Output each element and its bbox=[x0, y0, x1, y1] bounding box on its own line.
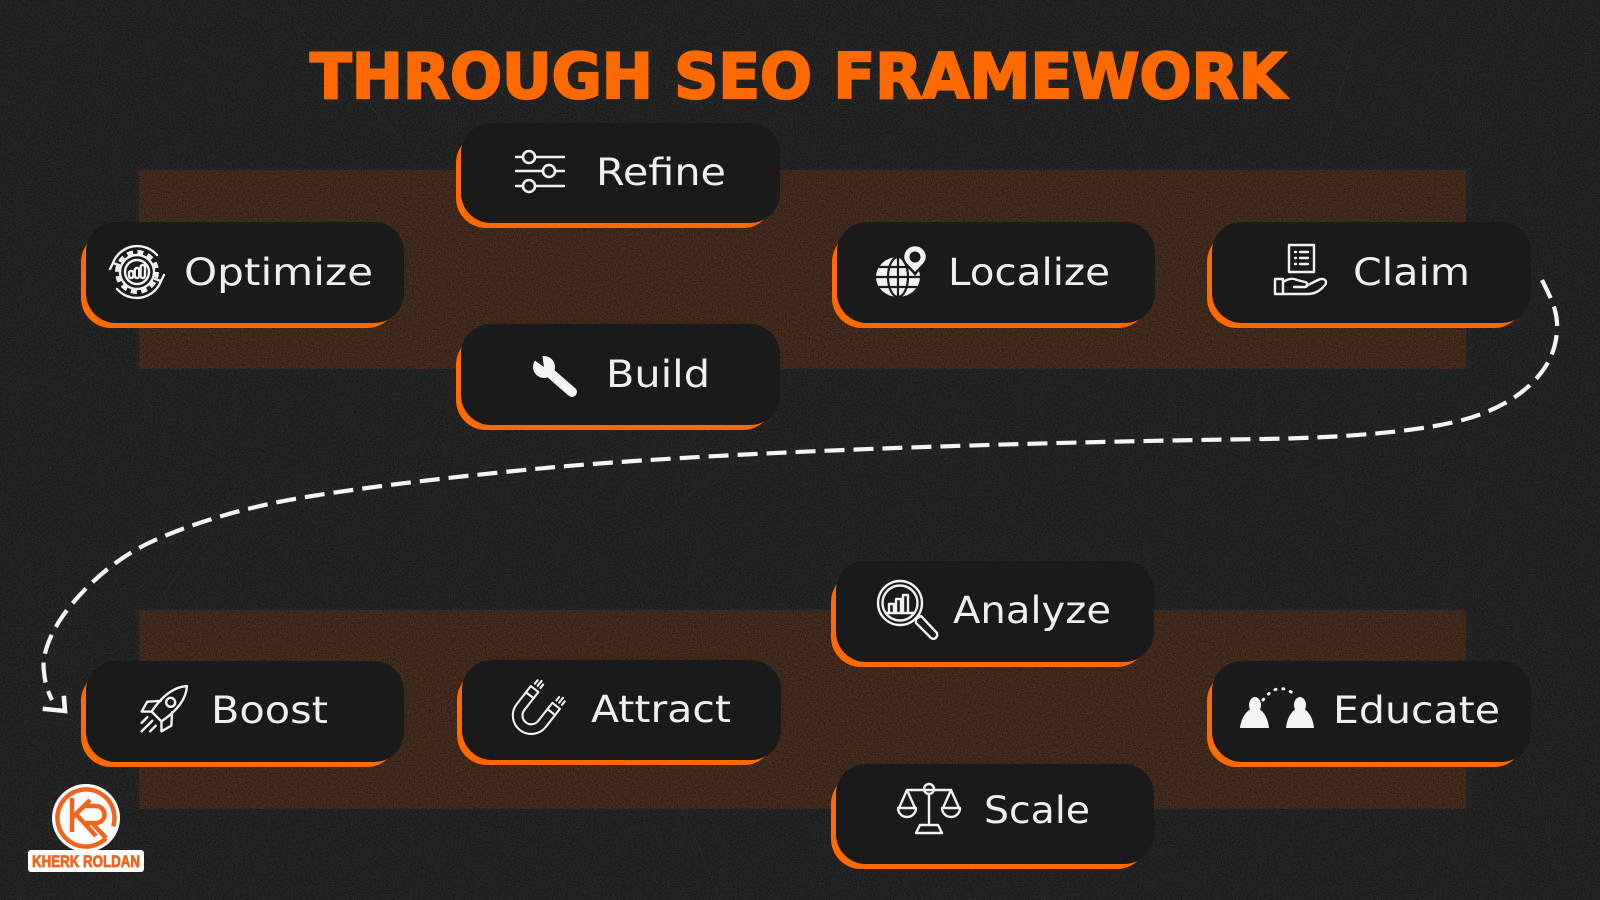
card: Educate bbox=[1207, 661, 1531, 767]
icon: gear with chart bbox=[110, 246, 164, 298]
label: Optimize bbox=[184, 251, 373, 294]
card: Localize bbox=[832, 222, 1155, 328]
label: Attract bbox=[591, 688, 731, 731]
icon: two people sharing bbox=[1240, 689, 1314, 728]
title: THROUGH SEO FRAMEWORK bbox=[310, 40, 1288, 113]
label: Boost bbox=[211, 689, 328, 732]
card: Boost bbox=[81, 661, 404, 767]
label: Scale bbox=[984, 789, 1090, 832]
icon: rocket bbox=[130, 674, 199, 743]
icon: magnet bbox=[505, 678, 566, 741]
band: bottom brown strip bbox=[139, 610, 1466, 809]
label: Refine bbox=[596, 151, 726, 194]
icon: balance scale bbox=[898, 784, 960, 833]
card: Attract bbox=[457, 660, 781, 765]
icon: wrench bbox=[530, 351, 572, 392]
icon: globe with pin bbox=[876, 245, 927, 297]
label: Localize bbox=[948, 251, 1110, 294]
label: Educate bbox=[1333, 689, 1500, 732]
arrow: dashed connector from Claim to Boost bbox=[44, 280, 1557, 711]
card: Build bbox=[456, 324, 780, 430]
logo wordmark: KHERK ROLDAN bbox=[32, 852, 140, 871]
logo: Kherk Roldan bbox=[28, 783, 144, 872]
card: Claim bbox=[1207, 222, 1531, 328]
card: Scale bbox=[831, 764, 1154, 869]
label: Build bbox=[606, 353, 710, 396]
label: Analyze bbox=[953, 589, 1111, 632]
label: Claim bbox=[1353, 251, 1470, 294]
band: top brown strip bbox=[139, 170, 1466, 369]
icon: hand with document bbox=[1275, 245, 1326, 294]
card: Analyze bbox=[831, 561, 1154, 667]
icon: sliders bbox=[516, 151, 564, 192]
card: Optimize bbox=[81, 222, 404, 328]
icon: magnifier with chart bbox=[878, 581, 937, 639]
card: Refine bbox=[456, 123, 780, 228]
